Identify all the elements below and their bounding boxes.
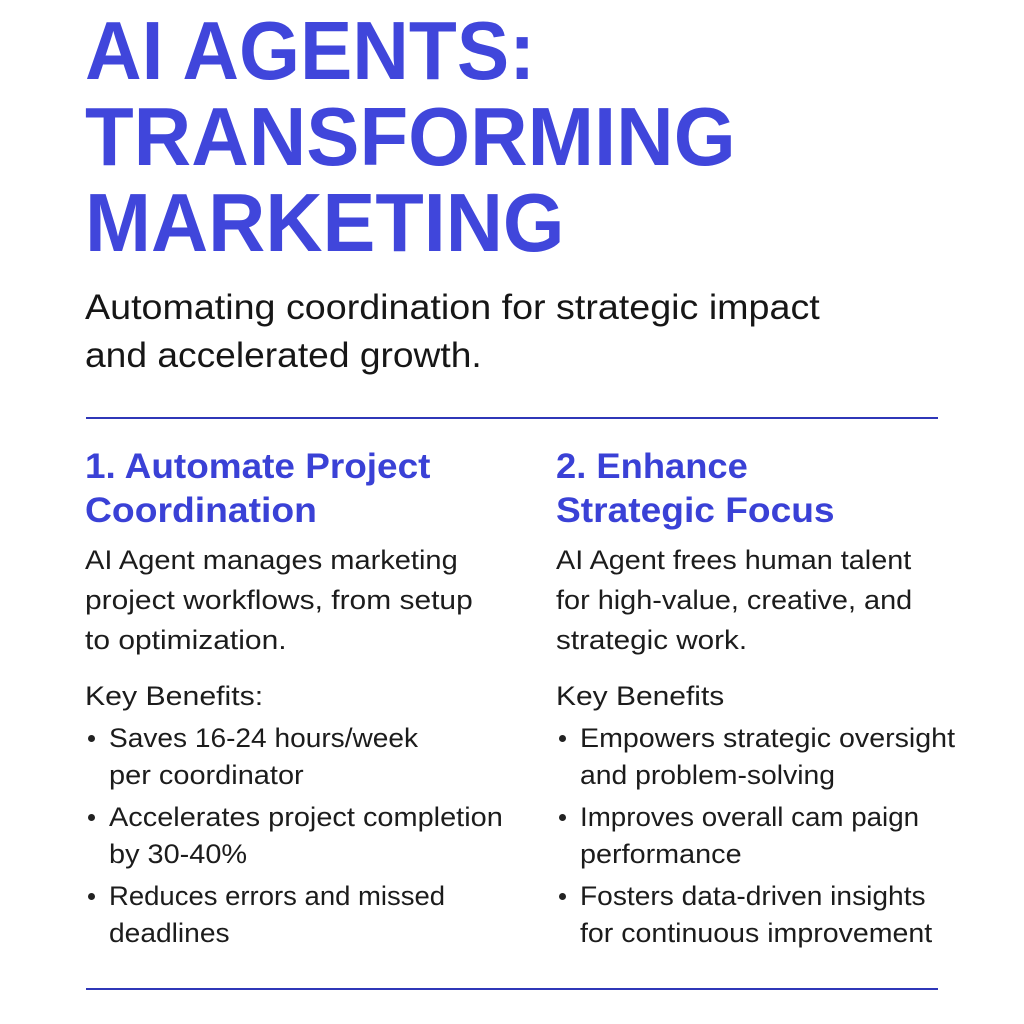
description: column 2: strategic work.: [556, 625, 747, 655]
benefit list: column 1: deadlines: [109, 918, 230, 948]
description: column 2: for high-value, creative, and: [556, 585, 912, 615]
description: column 2: [556, 545, 912, 655]
heading: column 1: Coordination: [85, 491, 317, 530]
benefit list: column 2: performance: [580, 839, 742, 869]
benefit list: column 1: [88, 723, 503, 948]
panel: enhance strategic focus: [556, 447, 955, 948]
benefit list: column 1: by 30-40%: [109, 839, 247, 869]
description: column 1: [85, 545, 473, 655]
heading: column 1: [85, 447, 430, 530]
benefit list: column 2: Improves overall cam paign: [580, 802, 919, 832]
description: column 1: to optimization.: [85, 625, 287, 655]
subtitle: [85, 288, 820, 375]
bottom divider: [86, 988, 938, 990]
benefit list: column 2: Fosters data-driven insights: [580, 881, 926, 911]
panel: automate project coordination: [85, 447, 503, 948]
benefit list: column 1: Accelerates project completion: [109, 802, 503, 832]
key benefits label: column 2: Key Benefits: [556, 681, 724, 711]
top divider: [86, 417, 938, 419]
benefit list: column 2: Empowers strategic oversight: [580, 723, 955, 753]
benefit list: column 2: for continuous improvement: [580, 918, 932, 948]
description: column 1: project workflows, from setup: [85, 585, 473, 615]
benefit list: column 1: per coordinator: [109, 760, 304, 790]
heading: column 1: 1. Automate Project: [85, 447, 430, 486]
subtitle: and accelerated growth.: [85, 336, 482, 375]
benefit list: column 2: and problem-solving: [580, 760, 835, 790]
benefit list: column 1: Saves 16-24 hours/week: [109, 723, 418, 753]
description: column 1: AI Agent manages marketing: [85, 545, 458, 575]
title: TRANSFORMING: [85, 90, 736, 183]
title: MARKETING: [85, 176, 564, 269]
key benefits label: column 1: Key Benefits:: [85, 681, 263, 711]
title: [85, 4, 736, 269]
heading: column 2: Strategic Focus: [556, 491, 835, 530]
description: column 2: AI Agent frees human talent: [556, 545, 911, 575]
subtitle: Automating coordination for strategic impact: [85, 288, 820, 327]
title: AI AGENTS:: [85, 4, 535, 97]
benefit list: column 1: Reduces errors and missed: [109, 881, 445, 911]
heading: column 2: [556, 447, 835, 530]
benefit list: column 2: [559, 723, 955, 948]
heading: column 2: 2. Enhance: [556, 447, 748, 486]
